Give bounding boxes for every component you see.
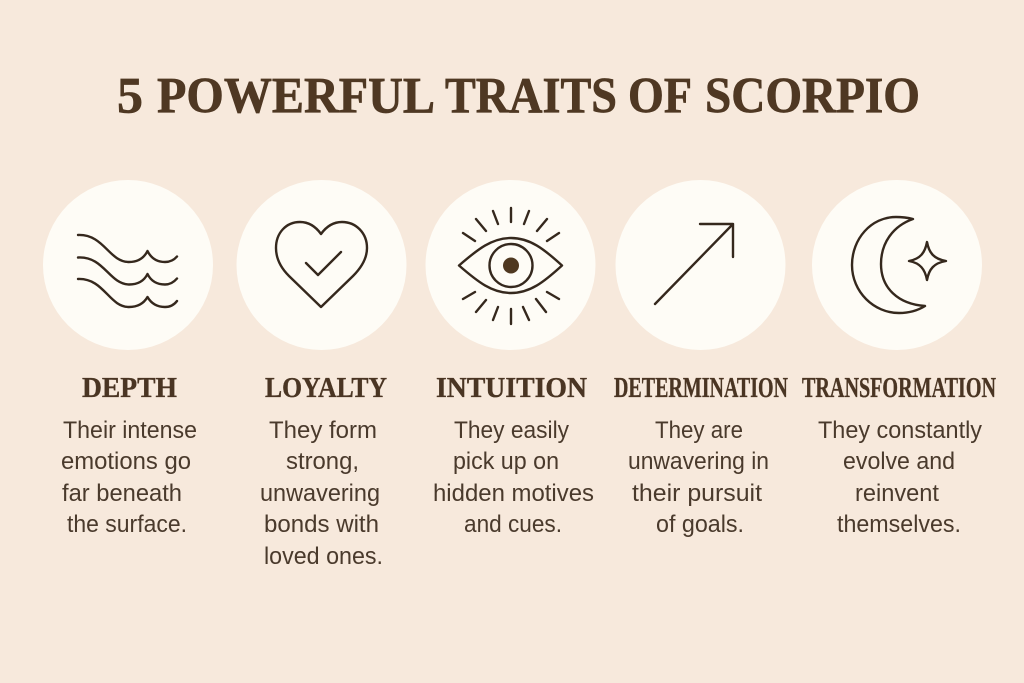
icon: waves xyxy=(43,180,213,350)
text: intuition description: hidden motives xyxy=(433,480,594,507)
icon: eye with rays xyxy=(426,180,596,350)
text: intuition description xyxy=(433,417,594,538)
heading: intuition: INTUITION xyxy=(436,373,587,404)
text: determination description: unwavering in xyxy=(628,448,769,475)
text: determination description: of goals. xyxy=(656,511,744,538)
panel: transformation xyxy=(802,180,996,538)
text: loyalty description xyxy=(260,417,383,570)
title: 5 xyxy=(117,68,143,124)
text: determination description: They are xyxy=(655,417,743,444)
text: determination description xyxy=(628,417,769,538)
text: depth description xyxy=(61,417,197,538)
panel: loyalty xyxy=(236,180,406,570)
text: loyalty description: unwavering xyxy=(260,480,380,507)
text: loyalty description: bonds with xyxy=(264,511,379,538)
text: transformation description: themselves. xyxy=(837,511,961,538)
text: loyalty description: loved ones. xyxy=(264,543,383,570)
text: intuition description: They easily xyxy=(454,417,569,444)
text: loyalty description: They form xyxy=(269,417,377,444)
text: depth description: the surface. xyxy=(67,511,187,538)
title: SCORPIO xyxy=(705,68,920,124)
text: depth description: far beneath xyxy=(62,480,182,507)
text: depth description: emotions go xyxy=(61,448,191,475)
title: TRAITS xyxy=(445,68,617,124)
text: transformation description: reinvent xyxy=(855,480,939,507)
text: transformation description: They constantly xyxy=(818,417,982,444)
title: OF xyxy=(628,68,692,124)
icon: crescent moon and star xyxy=(812,180,982,350)
text: intuition description: and cues. xyxy=(464,511,562,538)
text: intuition description: pick up on xyxy=(453,448,559,475)
panel: depth xyxy=(43,180,213,538)
icon: heart with check xyxy=(236,180,406,350)
text: transformation description xyxy=(818,417,982,538)
panel: intuition xyxy=(426,180,596,538)
title xyxy=(117,68,920,124)
text: loyalty description: strong, xyxy=(286,448,359,475)
title: POWERFUL xyxy=(157,68,435,124)
panel: determination xyxy=(614,180,788,538)
text: transformation description: evolve and xyxy=(843,448,955,475)
heading: determination: DETERMINATION xyxy=(614,373,788,404)
text: determination description: their pursuit xyxy=(632,480,762,507)
heading: loyalty: LOYALTY xyxy=(265,373,387,404)
text: depth description: Their intense xyxy=(63,417,197,444)
icon: arrow xyxy=(616,180,786,350)
heading: depth: DEPTH xyxy=(82,373,177,404)
